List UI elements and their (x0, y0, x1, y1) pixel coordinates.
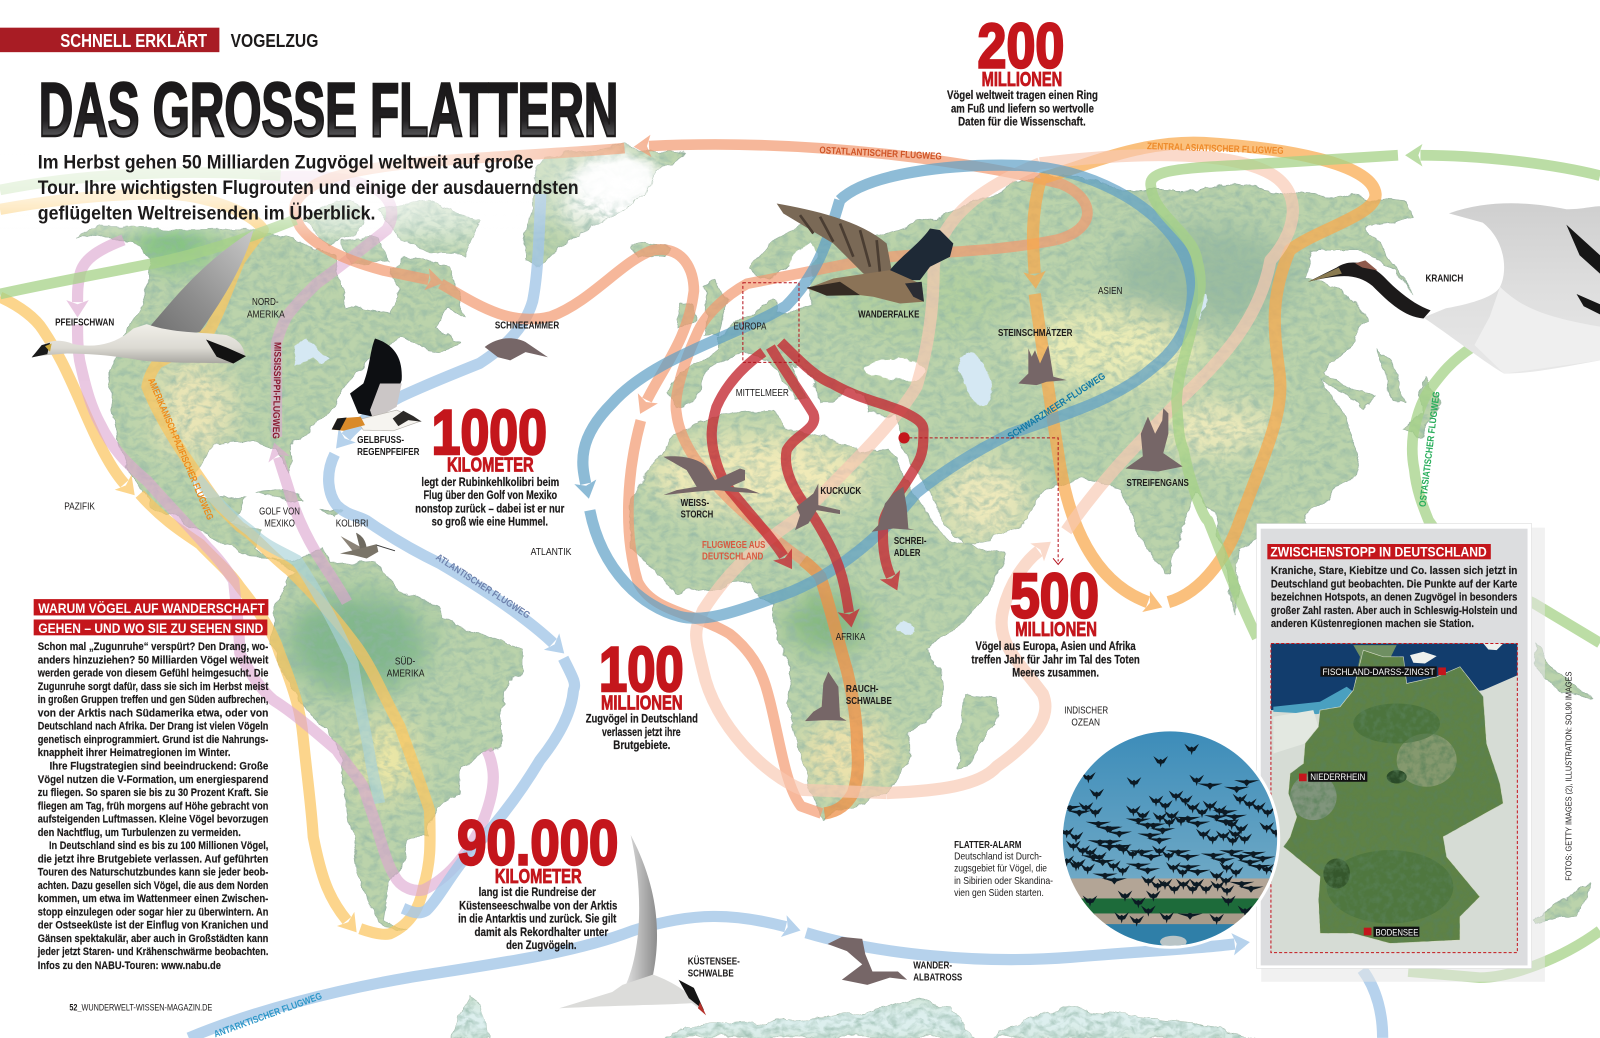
label: Golf von Mexiko (259, 506, 300, 530)
stat: 500 Millionen: Meeres zusammen. (1012, 667, 1099, 680)
panel body text: fliegen am Tag, früh morgens auf Höhe gebracht von (38, 800, 268, 812)
panel heading: ZWISCHENSTOPP IN DEUTSCHLAND (1270, 545, 1487, 561)
label: Rauchschwalbe (846, 684, 892, 707)
panel body text: die jetzt ihre Brutgebiete verlassen. Auf geführten (38, 853, 268, 865)
label: Gelbfuss-Regenpfeifer: REGENPFEIFER (357, 447, 419, 458)
label: Schreiadler (894, 536, 927, 559)
bird: Kuestenseeschwalbe (559, 835, 706, 1015)
label: Steinschmaetzer: STEINSCHMÄTZER (998, 328, 1072, 339)
panel text (1271, 565, 1517, 630)
stat: 200 Millionen: am Fuß und liefern so wertvolle (951, 102, 1094, 115)
label: Ostasiatischer Flugweg: OSTASIATISCHER FLUGWEG (1418, 391, 1443, 508)
label: Ostatlantischer Flugweg: OSTATLANTISCHER FLUGWEG (819, 145, 942, 163)
flyway: Zentralasiatisch orange (1033, 143, 1376, 602)
label: Kuckuck: KUCKUCK (820, 486, 861, 497)
bird: Streifengans (1126, 408, 1183, 472)
flyway: Antarktisch blue (189, 916, 1383, 1038)
intro text (38, 151, 579, 225)
stat: 1000 Kilometer: Flug über den Golf von Mexiko (423, 489, 557, 502)
bird: Kolibri (340, 533, 395, 558)
label: Atlantischer Flugweg: ATLANTISCHER FLUGWEG (433, 552, 532, 621)
flyway: pink (78, 176, 493, 890)
stat: 90.000 Kilometer: Küstenseeschwalbe von der Arktis (459, 899, 618, 912)
top left map fade (0, 143, 653, 240)
lakes and inland seas (294, 240, 1208, 635)
panel: Zwischenstopp in Deutschland (1257, 524, 1545, 982)
hotspot: Bodensee: BODENSEE (1376, 927, 1418, 937)
caption: Flatter-Alarm (954, 840, 1053, 899)
label: Streifengans: STREIFENGANS (1127, 478, 1189, 489)
label: Flugwege aus Deutschland (702, 540, 766, 562)
stat: 200 Millionen: MILLIONEN (982, 69, 1062, 91)
panel body text: Zugunruhe sorgt dafür, dass sie sich im Herbst meist (38, 681, 269, 693)
panel: Warum Voegel auf Wanderschaft (34, 599, 269, 972)
panel body text: jeder jetzt Staren- und Krähenschwärme beobachten. (37, 946, 268, 958)
stat: 200 Millionen (947, 11, 1098, 129)
flyways from Germany (712, 342, 923, 612)
label: Afrika: AFRIKA (836, 632, 866, 643)
section label: VOGELZUG (231, 30, 318, 51)
caption: Flatter-Alarm: in Sibirien oder Skandina- (954, 876, 1053, 887)
stat: 1000 Kilometer (415, 398, 565, 529)
marker: Europa dashed box (743, 283, 799, 362)
bird: Schneeammer (485, 338, 548, 360)
label: Zentralasiatischer Flugweg: ZENTRALASIATISCHER FLUGWEG (1147, 141, 1284, 157)
bird: Gelbfuss-Regenpfeifer (332, 338, 422, 431)
flyway: Ostasiatisch green (0, 155, 1600, 978)
label: Weissstorch: STORCH (681, 509, 713, 520)
bird: Steinschmaetzer (1018, 345, 1067, 385)
map and bird labels (55, 274, 1463, 984)
stat: 1000 Kilometer: so groß wie eine Hummel. (432, 516, 548, 529)
bird: Wanderalbatros (828, 937, 907, 985)
stat: 90.000 Kilometer: in die Antarktis und zurück. Sie gilt (458, 913, 616, 926)
flyway: pale peach (696, 155, 1293, 793)
stat: 1000 Kilometer: KILOMETER (447, 455, 534, 477)
flyway: Atlantisch light blue (329, 194, 575, 913)
label: Golf von Mexiko: GOLF VON (259, 506, 300, 517)
label: Rauchschwalbe: SCHWALBE (846, 696, 892, 707)
label: Gelbfuss-Regenpfeifer (357, 435, 419, 458)
hotspot: Bodensee (1364, 927, 1419, 937)
hotspot: Fischland-Darss-Zingst: FISCHLAND-DARSS-ZINGST (1322, 667, 1435, 677)
stat: 100 Millionen: MILLIONEN (601, 692, 683, 714)
label: Kranich: KRANICH (1426, 274, 1463, 285)
panel body text: genetisch einprogrammiert. Grund ist die Nahrungs- (38, 734, 269, 746)
panel body text: von der Arktis nach Südamerika etwa, oder von (38, 707, 268, 719)
stat: 1000 Kilometer: legt der Rubinkehlkolibri beim (421, 476, 559, 489)
title: DAS GROSSE FLATTERN (39, 68, 618, 153)
page footer: 52_WUNDERWELT-WISSEN-MAGAZIN.DE (69, 1002, 212, 1012)
label: Schneeammer: SCHNEEAMMER (495, 321, 559, 332)
label: Nordamerika (247, 297, 285, 320)
caption: Flatter-Alarm: FLATTER-ALARM (954, 840, 1021, 851)
label: Wanderalbatros: WANDER- (913, 960, 952, 971)
bird: Pfeifschwan (32, 230, 253, 363)
stat: 90.000 Kilometer: KILOMETER (495, 866, 582, 888)
label: Europa: EUROPA (734, 322, 767, 333)
stat: 90.000 Kilometer: lang ist die Rundreise der (479, 886, 596, 899)
panel body text: anders hinzuziehen? 50 Milliarden Vögel weltweit (38, 654, 269, 666)
bird: Rauchschwalbe (805, 672, 847, 721)
header bar: SCHNELL ERKLÄRT (60, 30, 208, 51)
stat: 90.000 Kilometer: 90.000 (457, 808, 618, 878)
panel heading: GEHEN – UND WO SIE ZU SEHEN SIND (38, 621, 263, 637)
panel text: bezeichnen Hotspots, an denen Zugvögel in besonders (1271, 592, 1517, 604)
marker: Totes Meer dot and dashed leader (898, 432, 1063, 564)
panel body text: Infos zu den NABU-Touren: www.nabu.de (38, 960, 221, 972)
label: Kuestenseeschwalbe (688, 956, 740, 980)
flyway: Afrika orange band (803, 560, 858, 813)
flyway: Schwarzmeer blue (583, 165, 1192, 618)
hotspot: Niederrhein: NIEDERRHEIN (1310, 772, 1365, 782)
label: Asien: ASIEN (1098, 286, 1122, 297)
label: Weissstorch: WEISS- (681, 498, 709, 509)
stat: 1000 Kilometer: 1000 (432, 398, 547, 468)
stat: 100 Millionen: 100 (599, 635, 684, 705)
bird: Kuckuck (795, 483, 840, 530)
caption: Flatter-Alarm: vien gen Süden starten. (954, 888, 1044, 899)
header bar (0, 28, 219, 52)
panel heading: WARUM VÖGEL AUF WANDERSCHAFT (38, 600, 265, 617)
flyway: Pazifik yellow (0, 194, 430, 934)
stat: 100 Millionen: Zugvögel in Deutschland (586, 713, 698, 726)
stat: 500 Millionen: treffen Jahr für Jahr im Tal des Toten (971, 653, 1140, 666)
panel body text: stopp einzulegen oder sogar hier zu überwintern. An (38, 906, 268, 918)
bird: Wanderfalke (777, 203, 953, 303)
intro text: geflügelten Weltreisenden im Überblick. (38, 202, 376, 225)
stat: 100 Millionen: Brutgebiete. (613, 739, 670, 752)
stat: 200 Millionen: Vögel weltweit tragen einen Ring (947, 89, 1098, 102)
stat: 100 Millionen: verlassen jetzt ihre (602, 726, 681, 739)
label: Gelbfuss-Regenpfeifer: GELBFUSS- (357, 435, 404, 446)
bird: Weissstorch (663, 456, 760, 495)
caption: Flatter-Alarm: zugsgebiet für Vögel, die (954, 864, 1047, 875)
flyway labels (145, 141, 1443, 1038)
label: Kuestenseeschwalbe: KÜSTENSEE- (688, 956, 740, 967)
label: Golf von Mexiko: MEXIKO (264, 519, 295, 530)
bird: Schreiadler (872, 487, 915, 532)
panel body text: Vögel nutzen die V-Formation, um energiesparend (38, 774, 268, 786)
intro text: Im Herbst gehen 50 Milliarden Zugvögel weltweit auf große (38, 151, 534, 173)
label: Rauchschwalbe: RAUCH- (846, 684, 879, 695)
label: Suedamerika: AMERIKA (387, 669, 425, 680)
label: Amerikanisch-Pazifischer Flugweg: AMERIKANISCH-PAZIFISCHER FLUGWEG (145, 377, 215, 522)
panel body text: achten. Dazu gesellen sich Vögel, die aus dem Norden (38, 880, 268, 892)
birds (32, 203, 1600, 1015)
label: Indischer Ozean: INDISCHER (1064, 705, 1108, 716)
stat: 500 Millionen: MILLIONEN (1015, 619, 1097, 641)
intro text: Tour. Ihre wichtigsten Flugrouten und einige der ausdauerndsten (38, 177, 579, 199)
label: Indischer Ozean (1064, 705, 1108, 729)
panel body text: in großen Gruppen treffen und gen Süden aufbrechen, (38, 694, 268, 706)
panel body text: knappheit ihrer Heimatregionen im Winter. (38, 747, 231, 759)
stat: 500 Millionen: Vögel aus Europa, Asien und Afrika (976, 640, 1136, 653)
stat: 1000 Kilometer: nonstop zurück – dabei ist er nur (415, 502, 565, 515)
stat: 100 Millionen (586, 635, 698, 752)
stat: 500 Millionen (971, 561, 1140, 680)
stat: 90.000 Kilometer: damit als Rekordhalter unter (474, 926, 609, 939)
stat: 500 Millionen: 500 (1010, 561, 1099, 631)
stat: 90.000 Kilometer: den Zugvögeln. (506, 939, 577, 952)
label: Schreiadler: ADLER (894, 548, 920, 559)
label: Nordamerika: AMERIKA (247, 309, 285, 320)
label: Wanderfalke: WANDERFALKE (858, 309, 920, 320)
flyway: Ostatlantisch peach (294, 144, 1087, 813)
panel body text: Ihre Flugstrategien sind beeindruckend: Große (49, 761, 268, 773)
climate zones (133, 153, 1296, 1038)
label: Mississippi-Flugweg: MISSISSIPPI-FLUGWEG (270, 342, 282, 439)
panel body text: werden gerade von diesem Gefühl heimgesucht. Die (37, 668, 268, 680)
label: Wanderalbatros: ALBATROSS (913, 973, 963, 984)
bird: Kranich (1308, 203, 1600, 374)
panel text: Deutschland gut beobachten. Die Punkte auf der Karte (1271, 578, 1517, 590)
panel body text: kommen, um etwa im Wattenmeer einen Zwischen- (38, 893, 269, 905)
panel body text: aufsteigenden Luftmassen. Kleine Vögel bevorzugen (38, 814, 268, 826)
panel text: großer Zahl rasten. Aber auch in Schleswig-Holstein und (1271, 605, 1517, 617)
stat: 200 Millionen: 200 (978, 11, 1064, 81)
panel body text: der Ostseeküste ist der Einflug von Kranichen und (38, 920, 268, 932)
panel body text: Schon mal „Zugunruhe“ verspürt? Den Drang, wo- (38, 641, 269, 653)
caption: Flatter-Alarm: Deutschland ist Durch- (954, 851, 1042, 862)
label: Pfeifschwan: PFEIFSCHWAN (55, 318, 114, 329)
flyway: Amerikanisch-Pazifisch light blue (197, 478, 380, 803)
panel body text: Deutschland nach Afrika. Der Drang ist vielen Vögeln (38, 721, 268, 733)
panel body text: In Deutschland sind es bis zu 100 Millionen Vögel, (49, 840, 268, 852)
panel body text: Touren des Naturschutzbundes kann sie jeder beob- (38, 867, 269, 879)
label: Nordamerika: NORD- (252, 297, 279, 308)
label: Schreiadler: SCHREI- (894, 536, 927, 547)
label: Suedamerika (387, 656, 425, 680)
label: Wanderalbatros (913, 960, 963, 984)
panel body text (37, 641, 269, 972)
label: Suedamerika: SÜD- (395, 656, 415, 667)
map of Germany (1271, 643, 1520, 953)
label: Indischer Ozean: OZEAN (1071, 718, 1100, 729)
label: Schwarzmeer-Flugweg: SCHWARZMEER-FLUGWEG (1006, 371, 1108, 442)
label: Atlantik: ATLANTIK (531, 547, 572, 558)
label: Flugwege aus Deutschland: FLUGWEGE AUS (702, 540, 766, 551)
panel body text: den Nachtflug, um Turbulenzen zu vermeiden. (38, 827, 241, 839)
panel text: Kraniche, Stare, Kiebitze und Co. lassen sich jetzt in (1271, 565, 1517, 577)
photo: flock of geese in circle (1057, 728, 1283, 954)
panel heading (34, 599, 268, 637)
label: Kolibri: KOLIBRI (336, 519, 368, 530)
label: Pazifik: PAZIFIK (64, 501, 95, 512)
stat: 90.000 Kilometer (457, 808, 618, 952)
panel body text: Gänsen spektakulär, aber auch in Großstädten kann (38, 933, 268, 945)
stat: 200 Millionen: Daten für die Wissenschaft. (958, 116, 1086, 129)
label: Flugwege aus Deutschland: DEUTSCHLAND (702, 551, 763, 562)
panel body text: zu fliegen. So sparen sie bis zu 30 Prozent Kraft. Sie (38, 787, 268, 799)
label: Weissstorch (681, 498, 713, 520)
label: Mittelmeer: MITTELMEER (736, 388, 789, 399)
label: Kuestenseeschwalbe: SCHWALBE (688, 969, 734, 980)
panel text: anderen Küstenregionen machen sie Station. (1271, 618, 1474, 630)
photo credit: FOTOS: GETTY IMAGES (2), ILLUSTRATION: SOL90 IMAGES (1563, 671, 1573, 881)
